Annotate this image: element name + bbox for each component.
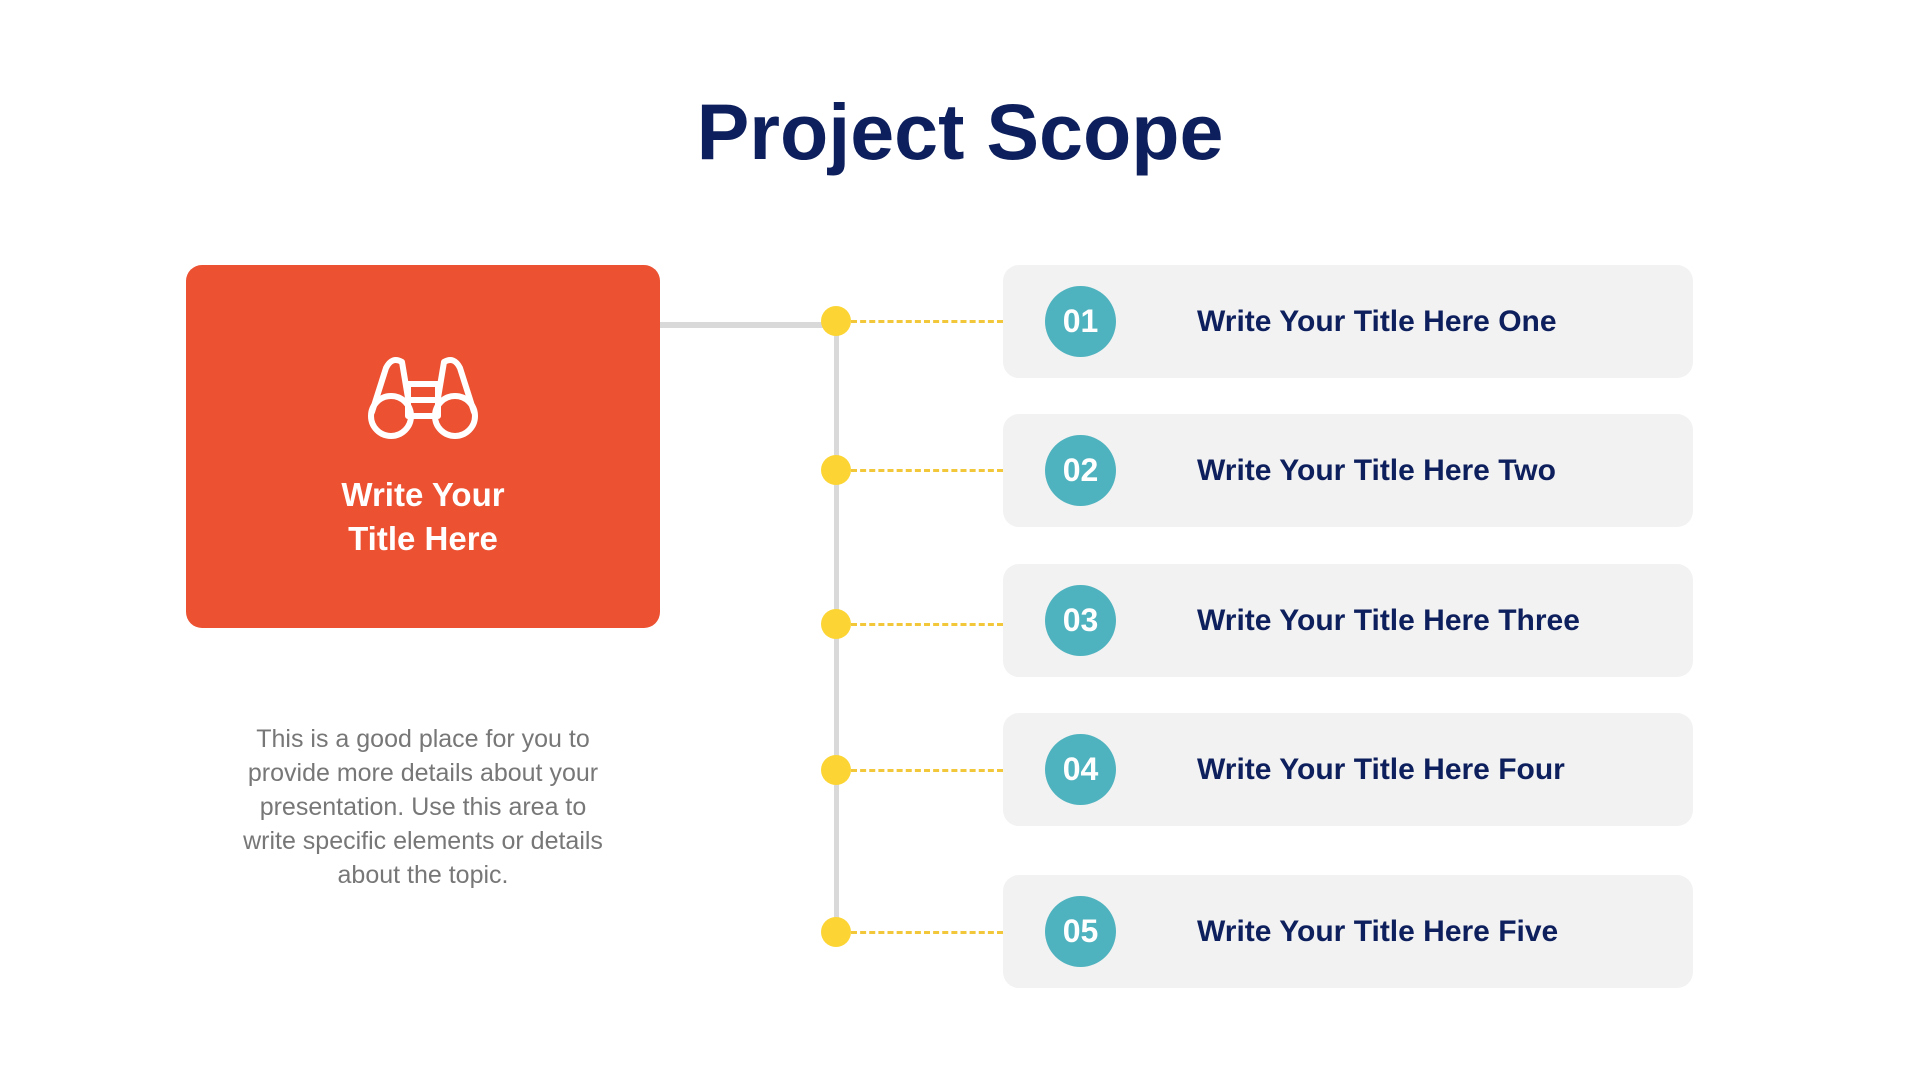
text: 02 [1063, 452, 1098, 488]
text: description: provide more details about your [248, 759, 598, 787]
text: main title: Write Your [341, 476, 505, 513]
text: description [243, 725, 603, 889]
item 05 [821, 875, 1693, 988]
text: Write Your Title Here Two [1197, 454, 1556, 487]
text: description: presentation. Use this area to [260, 793, 586, 821]
text: description: This is a good place for you to [256, 725, 590, 753]
item 03 [821, 564, 1693, 677]
text: Write Your Title Here Four [1197, 753, 1565, 786]
icon: binoculars [368, 357, 478, 439]
text: main title: Title Here [348, 520, 498, 557]
text: main title [341, 476, 505, 557]
text: 04 [1063, 751, 1098, 787]
panel: main orange [186, 265, 660, 628]
item 04 [821, 713, 1693, 826]
connector: horizontal gray [660, 322, 838, 328]
text: Write Your Title Here Three [1197, 604, 1580, 637]
item 02 [821, 414, 1693, 527]
text: Write Your Title Here One [1197, 305, 1557, 338]
item 01 [821, 265, 1693, 378]
text: Write Your Title Here Five [1197, 915, 1558, 948]
text: 05 [1063, 913, 1098, 949]
text: description: about the topic. [338, 861, 508, 889]
connector: vertical gray [834, 321, 839, 932]
text: description: write specific elements or details [243, 827, 603, 855]
text: 01 [1063, 303, 1098, 339]
title: Project Scope [697, 87, 1223, 176]
text: 03 [1063, 602, 1098, 638]
